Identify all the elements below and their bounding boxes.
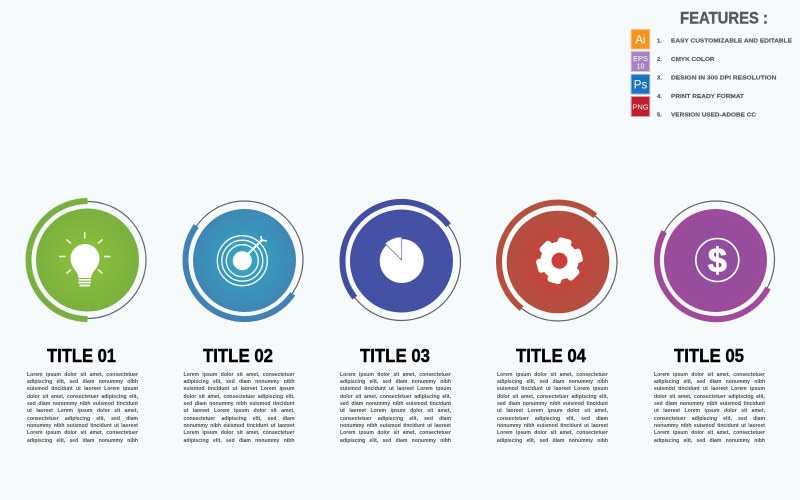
thin ring bbox=[658, 201, 774, 318]
body text: sed diam nonummy nibh euismod tincidunt bbox=[654, 401, 765, 407]
body text: ut laoreet Lorem ipsum dolor sit amet, bbox=[497, 408, 608, 414]
feature list bbox=[657, 38, 792, 118]
panel: title 04 bbox=[496, 200, 618, 444]
body text: euismod tincidunt ut laoreet Lorem ipsum bbox=[340, 386, 451, 392]
body text bbox=[27, 372, 138, 444]
body text: euismod tincidunt ut laoreet Lorem ipsum bbox=[27, 386, 138, 392]
thick arc bbox=[28, 201, 87, 319]
title: TITLE 04 bbox=[516, 346, 586, 366]
body text: adipiscing elit, sed diam nonummy nibh bbox=[497, 379, 608, 385]
disc bbox=[350, 210, 453, 312]
feature list: EASY CUSTOMIZABLE AND EDITABLE bbox=[671, 38, 792, 44]
body text: Lorem ipsum dolor sit amet, consectetuer bbox=[654, 430, 765, 436]
thin ring bbox=[342, 202, 460, 320]
disc bbox=[36, 208, 139, 312]
body text: ut laoreet Lorem ipsum dolor sit amet, bbox=[654, 408, 765, 414]
icon: dollar bbox=[696, 238, 739, 282]
body text: Lorem ipsum dolor sit amet, consectetuer bbox=[184, 430, 294, 436]
title: TITLE 02 bbox=[203, 346, 273, 366]
body text: adipiscing elit, sed diam nonummy nibh bbox=[340, 438, 451, 444]
icon: pie chart bbox=[380, 237, 424, 283]
feature list: PRINT READY FORMAT bbox=[671, 94, 745, 100]
icon: gear bbox=[531, 232, 588, 289]
body text: adipiscing elit, sed diam nonummy nibh bbox=[184, 438, 294, 444]
icon: PNG badge: PNG bbox=[632, 102, 649, 112]
body text: consectetuer adipiscing elit, sed diam bbox=[497, 416, 608, 422]
body text bbox=[184, 372, 294, 444]
icon: PNG badge bbox=[631, 96, 650, 116]
icon: EPS badge: 10 bbox=[637, 64, 644, 70]
feature list: 1. bbox=[657, 38, 662, 44]
panel: title 05 bbox=[654, 200, 776, 444]
body text: dolor sit amet, consectetuer adipiscing elit, bbox=[184, 394, 294, 400]
body text bbox=[497, 372, 608, 444]
body text bbox=[340, 372, 451, 444]
icon: EPS badge: EPS bbox=[633, 54, 648, 63]
body text: adipiscing elit, sed diam nonummy nibh bbox=[654, 438, 765, 444]
title: TITLE 01 bbox=[47, 346, 116, 366]
disc bbox=[193, 209, 296, 312]
feature list: 2. bbox=[657, 57, 662, 63]
body text: Lorem ipsum dolor sit amet, consectetuer bbox=[654, 372, 765, 378]
body text: consectetuer adipiscing elit, sed diam bbox=[184, 416, 294, 422]
body text: dolor sit amet, consectetuer adipiscing elit, bbox=[27, 394, 138, 400]
icon: Ai badge bbox=[631, 30, 650, 49]
body text: Lorem ipsum dolor sit amet, consectetuer bbox=[497, 430, 608, 436]
body text: Lorem ipsum dolor sit amet, consectetuer bbox=[497, 372, 608, 378]
title: TITLE 05 bbox=[674, 346, 744, 366]
panel: features bbox=[630, 8, 792, 118]
body text: dolor sit amet, consectetuer adipiscing elit, bbox=[654, 394, 765, 400]
body text: dolor sit amet, consectetuer adipiscing elit, bbox=[340, 394, 451, 400]
body text: Lorem ipsum dolor sit amet, consectetuer bbox=[184, 372, 294, 378]
feature list: DESIGN IN 300 DPI RESOLUTION bbox=[671, 76, 776, 82]
icon: Ps badge: Ps bbox=[634, 80, 647, 92]
icon: Ps badge bbox=[631, 74, 650, 94]
disc bbox=[507, 211, 609, 313]
thick arc bbox=[342, 202, 448, 298]
body text: sed diam nonummy nibh euismod tincidunt bbox=[27, 401, 138, 407]
thick arc bbox=[499, 203, 595, 308]
feature list: 4. bbox=[657, 94, 662, 100]
thick arc bbox=[185, 226, 293, 319]
icon: light bulb bbox=[59, 232, 110, 286]
body text: Lorem ipsum dolor sit amet, consectetuer bbox=[27, 430, 138, 436]
body text: sed diam nonummy nibh euismod tincidunt bbox=[340, 401, 451, 407]
body text bbox=[654, 372, 765, 444]
body text: adipiscing elit, sed diam nonummy nibh bbox=[497, 438, 608, 444]
body text: adipiscing elit, sed diam nonummy nibh bbox=[27, 438, 138, 444]
body text: sed diam nonummy nibh euismod tincidunt bbox=[497, 401, 608, 407]
body text: adipiscing elit, sed diam nonummy nibh bbox=[654, 379, 765, 385]
body text: ut laoreet Lorem ipsum dolor sit amet, bbox=[27, 408, 138, 414]
body text: ut laoreet Lorem ipsum dolor sit amet, bbox=[340, 408, 451, 414]
disc bbox=[664, 209, 767, 312]
icon: dollar: $ bbox=[708, 242, 727, 280]
thick arc bbox=[657, 232, 768, 319]
body text: dolor sit amet, consectetuer adipiscing elit, bbox=[497, 394, 608, 400]
body text: euismod tincidunt ut laoreet Lorem ipsum bbox=[654, 386, 765, 392]
body text: nonummy nibh euismod tincidunt ut laoreet bbox=[497, 423, 608, 429]
body text: nonummy nibh euismod tincidunt ut laoreet bbox=[27, 423, 138, 429]
body text: adipiscing elit, sed diam nonummy nibh bbox=[184, 379, 294, 385]
thin ring bbox=[499, 203, 617, 321]
icon: EPS badge bbox=[631, 52, 650, 72]
feature list: CMYK COLOR bbox=[671, 57, 715, 63]
body text: ut laoreet Lorem ipsum dolor sit amet, bbox=[184, 408, 294, 414]
feature list: 5. bbox=[657, 112, 662, 118]
body text: nonummy nibh euismod tincidunt ut laoreet bbox=[184, 423, 294, 429]
body text: euismod tincidunt ut laoreet Lorem ipsum bbox=[184, 386, 294, 392]
body text: nonummy nibh euismod tincidunt ut laoreet bbox=[654, 423, 765, 429]
body text: consectetuer adipiscing elit, sed diam bbox=[340, 416, 451, 422]
title: TITLE 03 bbox=[360, 346, 430, 366]
body text: Lorem ipsum dolor sit amet, consectetuer bbox=[27, 372, 138, 378]
feature list: 3. bbox=[657, 76, 662, 82]
body text: adipiscing elit, sed diam nonummy nibh bbox=[340, 379, 451, 385]
body text: Lorem ipsum dolor sit amet, consectetuer bbox=[340, 372, 451, 378]
feature list: VERSION USED-ADOBE CC bbox=[671, 112, 757, 118]
body text: adipiscing elit, sed diam nonummy nibh bbox=[27, 379, 138, 385]
body text: sed diam nonummy nibh euismod tincidunt bbox=[184, 401, 294, 407]
heading: features: FEATURES : bbox=[680, 8, 768, 28]
body text: nonummy nibh euismod tincidunt ut laoreet bbox=[340, 423, 451, 429]
icon: target bbox=[217, 236, 267, 286]
body text: Lorem ipsum dolor sit amet, consectetuer bbox=[340, 430, 451, 436]
thin ring bbox=[29, 202, 146, 318]
thin ring bbox=[186, 201, 303, 318]
icon: Ai badge: Ai bbox=[635, 34, 646, 46]
panel: title 02 bbox=[182, 200, 304, 444]
body text: consectetuer adipiscing elit, sed diam bbox=[27, 416, 138, 422]
body text: consectetuer adipiscing elit, sed diam bbox=[654, 416, 765, 422]
panel: title 03 bbox=[340, 198, 462, 444]
panel: title 01 bbox=[26, 198, 147, 444]
body text: euismod tincidunt ut laoreet Lorem ipsum bbox=[497, 386, 608, 392]
